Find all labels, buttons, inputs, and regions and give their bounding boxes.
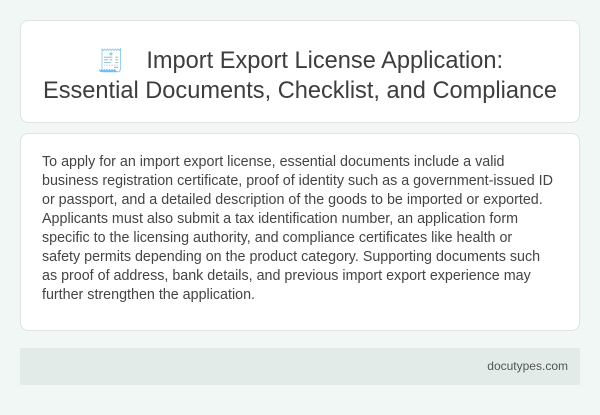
text block: business registration certificate, proof of identity such as a government-issued ID: [42, 173, 553, 189]
footer: [20, 348, 580, 385]
title: 🧾 Import Export License Application:: [97, 48, 503, 74]
title: Essential Documents, Checklist, and Compliance: [43, 78, 557, 104]
title card: [20, 20, 580, 123]
text block: safety permits depending on the product category. Supporting documents such: [42, 249, 540, 265]
text block: as proof of address, bank details, and previous import export experience may: [42, 268, 531, 284]
text block: Applicants must also submit a tax identification number, an application form: [42, 211, 518, 227]
panel: description: [20, 133, 580, 331]
title: [43, 48, 557, 104]
text block: or passport, and a detailed description of the goods to be imported or exported.: [42, 192, 543, 208]
text block: [42, 154, 553, 303]
text block: specific to the licensing authority, and compliance certificates like health or: [42, 230, 512, 246]
footer: docutypes.com: [487, 359, 568, 373]
text block: further strengthen the application.: [42, 287, 255, 303]
text block: To apply for an import export license, essential documents include a valid: [42, 154, 505, 170]
